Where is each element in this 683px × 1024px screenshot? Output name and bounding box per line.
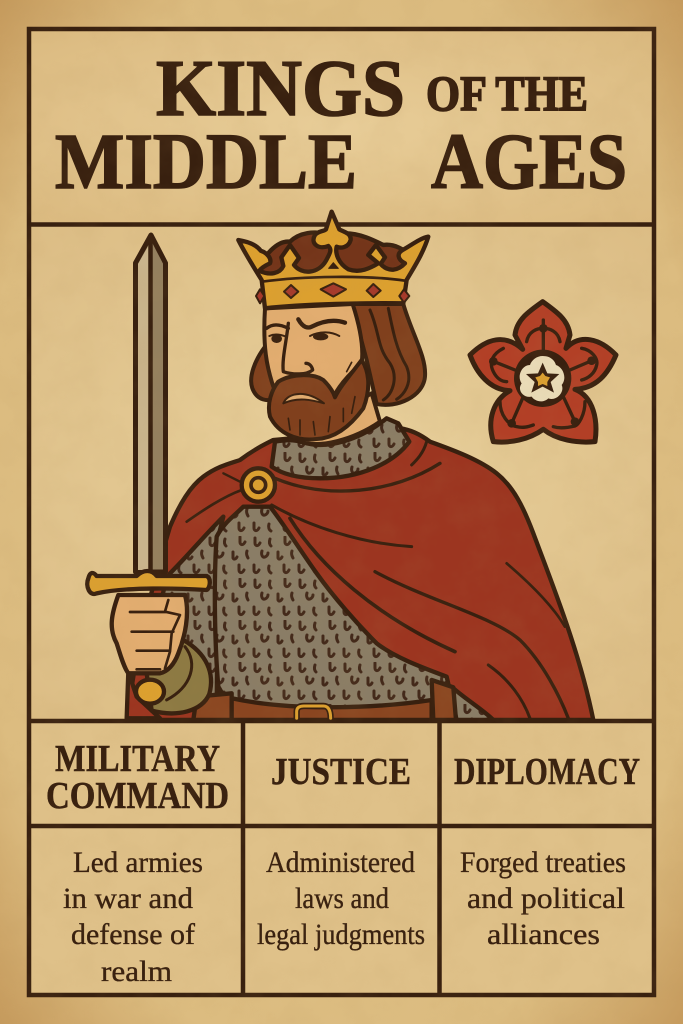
face [264,304,362,398]
cape clasp [242,468,275,502]
beard lines [288,397,355,435]
heading: military command: COMMAND [46,775,229,817]
text: diplomacy description: alliances [487,918,600,951]
red sleeve [127,672,160,718]
neck [300,393,380,444]
text: justice description: laws and [295,882,389,915]
text: diplomacy description [460,846,626,951]
text: military command description: realm [101,955,172,988]
crown notch [329,263,338,268]
text: military command description: Led armies [73,846,203,879]
title: Middle Ages: MIDDLE [55,119,357,206]
title: Kings of the: OF THE [426,65,588,121]
rose inner white [520,356,564,401]
title: Kings of the: KINGS [156,45,405,133]
king head [251,304,425,444]
panel: illustration background [30,226,653,720]
text: justice description: legal judgments [257,918,425,951]
text: justice description: Administered [266,846,415,879]
finger lines [130,600,180,669]
moustache highlight [283,394,324,403]
rose centre ring [514,350,571,407]
crown jewels [256,283,409,303]
crown band line [262,277,405,282]
crown cap [258,233,410,275]
text: diplomacy description: Forged treaties [460,846,626,879]
crossguard [87,571,210,594]
text: justice description [257,846,425,951]
sword blade [136,235,166,572]
rose star [526,363,559,393]
belt [193,680,456,720]
heading: military command: MILITARY [55,738,220,780]
heading: military command [46,738,229,817]
eye pupils [272,333,328,343]
crown [238,212,428,308]
title: Middle Ages: AGES [431,119,627,206]
pommel [136,680,164,704]
cape folds [187,442,568,718]
text: military command description [63,846,203,988]
belt buckle [297,706,331,718]
title: Kings of the [156,45,588,133]
panel: roles table [30,722,653,994]
king body [128,418,593,720]
chainmail collar [272,418,409,478]
title: Middle Ages [55,119,627,206]
cape [128,428,593,720]
vambrace [147,640,211,713]
fist [112,595,187,673]
chainmail torso [215,507,493,720]
vein nodes [489,324,596,428]
rose petals [470,302,616,442]
petal veins [491,320,597,428]
hand and hilt [87,571,211,718]
brows, eyes, nose [267,319,352,374]
chainmail arm [160,517,223,710]
text: military command description: in war and [63,882,193,915]
panel: title [30,30,653,224]
text: military command description: defense of [71,918,195,951]
heading: justice: JUSTICE [271,751,411,793]
beard [269,360,368,439]
hair [251,304,425,405]
heraldic rose [470,302,616,442]
crown gold points [238,212,428,308]
hair strands [370,308,409,400]
text: diplomacy description: and political [467,882,625,915]
rose star centre [535,373,550,386]
